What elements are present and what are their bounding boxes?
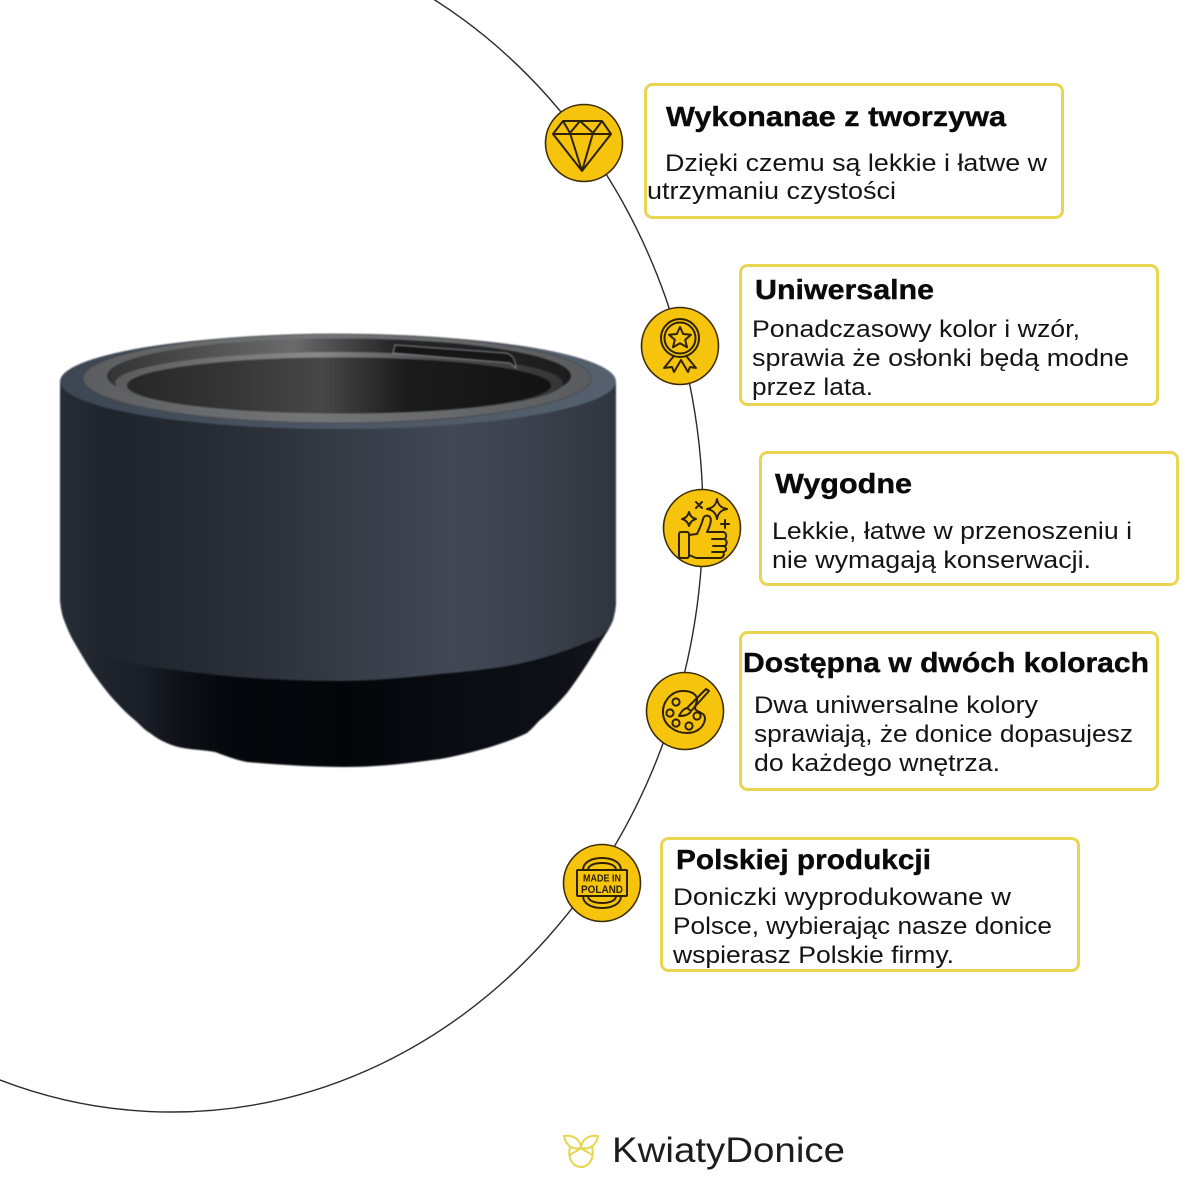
- icon: medal with star: [642, 308, 718, 384]
- stamp text second line: POLAND: [581, 884, 623, 896]
- body text: Lekkie, łatwe w przenoszeniu i: [772, 518, 1132, 545]
- body text: Dwa uniwersalne kolory: [754, 692, 1039, 719]
- panel: Wykonanae z tworzywa: [646, 84, 1062, 218]
- heading: Polskiej produkcji: [676, 844, 931, 875]
- inner pot ledge: [115, 352, 563, 414]
- body text: wspierasz Polskie firmy.: [672, 942, 954, 969]
- body text: nie wymagają konserwacji.: [772, 547, 1091, 574]
- planter rim top surface: [60, 334, 616, 429]
- body text: utrzymaniu czystości: [647, 178, 896, 205]
- plastic inner ring: [83, 334, 591, 423]
- heading: Wygodne: [775, 468, 912, 499]
- icon: logo flower: [564, 1136, 598, 1167]
- planter lower band and silhouette: [60, 382, 616, 767]
- body text: do każdego wnętrza.: [754, 750, 1000, 777]
- panel: Dostępna w dwóch kolorach: [740, 632, 1158, 790]
- planter body: [60, 384, 616, 682]
- icon: made in Poland stamp: [564, 844, 640, 922]
- body text: sprawiają, że donice dopasujesz: [754, 721, 1133, 748]
- inner pot clip tab: [393, 345, 516, 368]
- body text: przez lata.: [752, 374, 873, 401]
- panel: Uniwersalne: [740, 266, 1158, 404]
- body text: sprawia że osłonki będą modne: [752, 345, 1129, 372]
- product photo: dark blue round planter: [60, 334, 616, 767]
- stamp text: MADE IN: [583, 874, 621, 884]
- icon: thumbs up with sparkles: [664, 490, 740, 566]
- heading: Dostępna w dwóch kolorach: [743, 647, 1149, 678]
- heading: Uniwersalne: [755, 274, 934, 305]
- curved timeline arc: [0, 0, 703, 1112]
- logo: KwiatyDonice: [564, 1131, 845, 1170]
- body text: Polsce, wybierając nasze donice: [673, 913, 1052, 940]
- icon: painter's palette and brush: [646, 672, 724, 750]
- inner pot opening: [107, 338, 571, 414]
- inner pot well: [127, 358, 551, 414]
- panel: Wygodne: [760, 452, 1178, 584]
- body text: Dzięki czemu są lekkie i łatwe w: [665, 150, 1047, 177]
- panel: Polskiej produkcji: [662, 838, 1078, 970]
- heading: Wykonanae z tworzywa: [666, 101, 1006, 132]
- body text: Ponadczasowy kolor i wzór,: [752, 316, 1080, 343]
- wordmark: KwiatyDonice: [612, 1131, 845, 1170]
- icon: diamond: [546, 104, 622, 182]
- body text: Doniczki wyprodukowane w: [673, 884, 1011, 911]
